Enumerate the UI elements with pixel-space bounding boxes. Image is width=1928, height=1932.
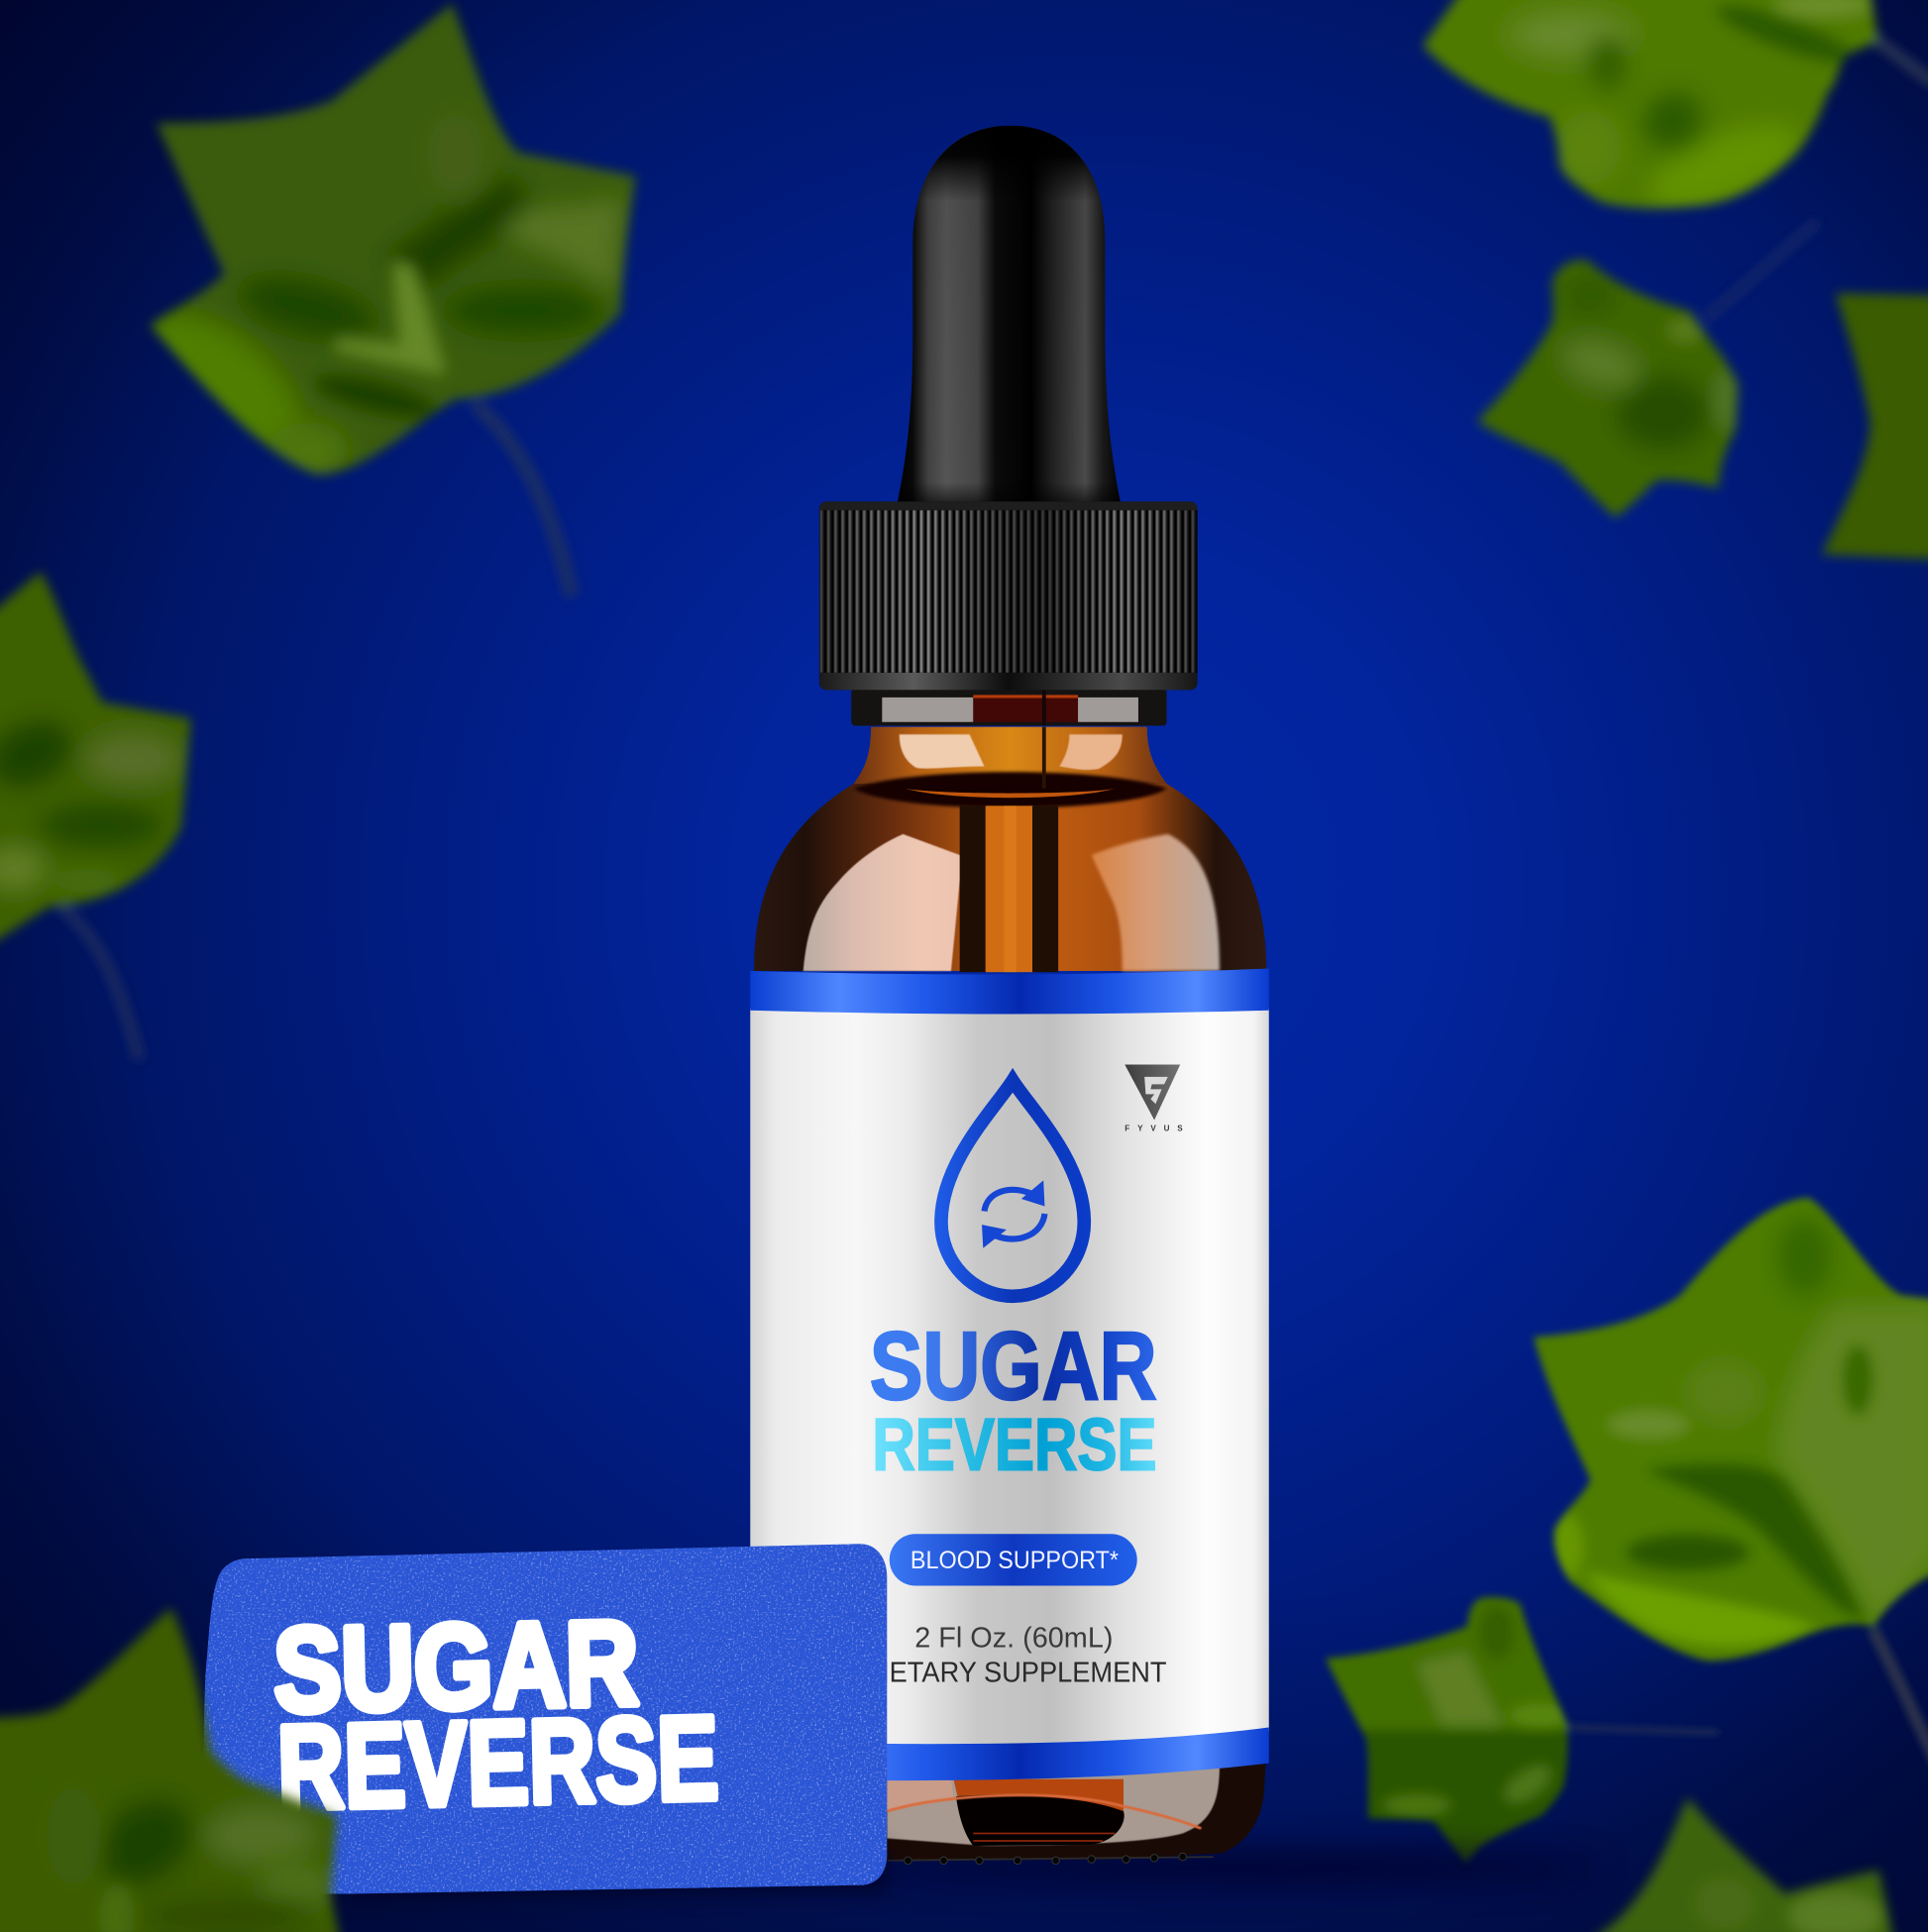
- brand logo: [1125, 1064, 1183, 1133]
- product name: SUGAR: [870, 1312, 1157, 1420]
- blue card: brand name: [203, 1544, 887, 1893]
- white label: [750, 968, 1269, 1780]
- ribbed cap: [819, 501, 1198, 690]
- dropper bulb: [897, 126, 1122, 505]
- product name: REVERSE: [872, 1403, 1157, 1486]
- size text: 2 Fl Oz. (60mL): [914, 1623, 1113, 1655]
- icon: refresh arrows: [982, 1180, 1044, 1248]
- card title: SUGAR: [272, 1596, 640, 1737]
- ground shadow: [862, 1851, 1601, 1885]
- leaf: right middle: [1477, 222, 1818, 517]
- glass shoulder and body: [754, 727, 1266, 972]
- neck collar: [851, 689, 1167, 725]
- top blue band: [750, 968, 1269, 1015]
- leaf: small lower right: [1326, 1597, 1719, 1866]
- leaf: right edge: [1822, 293, 1928, 560]
- icon: water drop: [941, 1081, 1084, 1296]
- card title: [272, 1596, 720, 1835]
- product name: [870, 1312, 1157, 1486]
- product: dropper bottle: [750, 126, 1269, 1865]
- card shadow: [345, 1848, 887, 1897]
- leaf: bottom right corner: [1590, 1797, 1893, 1932]
- bottom glass: [754, 1750, 1266, 1865]
- pill badge: [890, 1534, 1137, 1586]
- leaf: top right: [1423, 0, 1928, 226]
- card title: REVERSE: [276, 1691, 720, 1835]
- brand logo: FYVUS: [1125, 1125, 1183, 1133]
- leaf: large lower right: [1534, 1198, 1928, 1762]
- leaf: left edge: [0, 572, 191, 1060]
- leaf: large top left: [120, 4, 636, 596]
- bottom blue band: [750, 1728, 1269, 1780]
- leaf: foreground bottom left: [0, 1608, 340, 1932]
- supplement text: DIETARY SUPPLEMENT: [862, 1658, 1167, 1689]
- pill badge: BLOOD SUPPORT*: [910, 1547, 1119, 1574]
